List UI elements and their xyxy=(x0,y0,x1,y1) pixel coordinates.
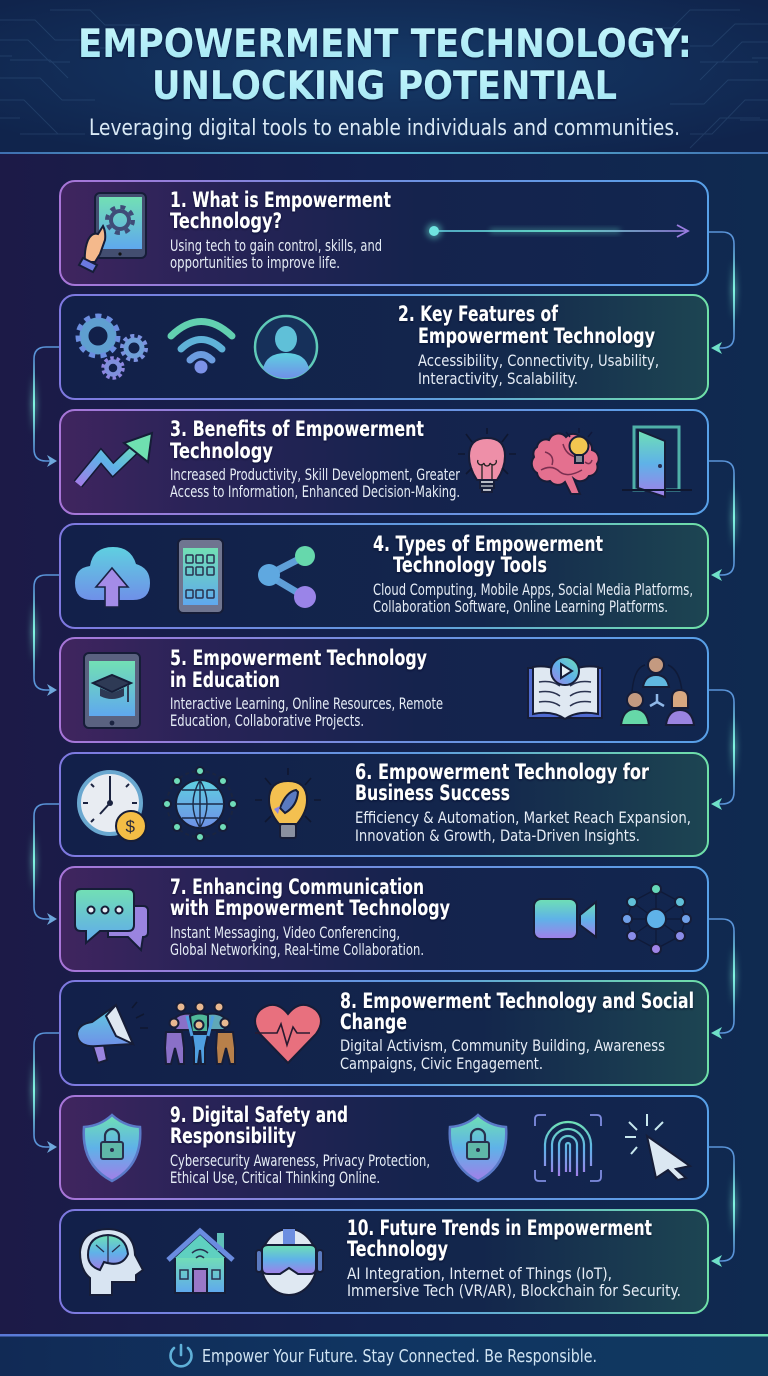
heading: 2. Key Features of xyxy=(398,302,559,326)
header title: UNLOCKING POTENTIAL xyxy=(152,64,617,109)
icon: group of people xyxy=(165,1002,235,1064)
icon: fingerprint xyxy=(535,1115,601,1181)
description xyxy=(170,694,443,730)
description: Ethical Use, Critical Thinking Online. xyxy=(170,1168,380,1187)
icon: share nodes xyxy=(258,546,316,608)
description: Innovation & Growth, Data-Driven Insights. xyxy=(355,826,640,845)
description: Using tech to gain control, skills, and xyxy=(170,236,382,255)
description: Immersive Tech (VR/AR), Blockchain for Security. xyxy=(347,1281,681,1300)
heading xyxy=(170,1103,348,1148)
icon: gears xyxy=(78,316,146,378)
icon: clock and dollar coin xyxy=(79,772,146,841)
description: Collaboration Software, Online Learning Platforms. xyxy=(373,597,668,616)
icon: smartphone xyxy=(178,539,223,613)
heading: Technology xyxy=(170,439,273,463)
icon: heart with pulse xyxy=(255,1005,321,1063)
header title: EMPOWERMENT TECHNOLOGY: xyxy=(78,22,692,67)
heading: in Education xyxy=(170,668,280,692)
description: Accessibility, Connectivity, Usability, xyxy=(418,351,659,370)
panel 3: benefits xyxy=(60,410,708,514)
heading xyxy=(340,989,694,1034)
icon: megaphone xyxy=(77,1002,148,1063)
heading: Responsibility xyxy=(170,1124,296,1148)
description xyxy=(170,236,382,272)
icon: three people collaborating xyxy=(621,657,694,725)
heading: 9. Digital Safety and xyxy=(170,1103,348,1127)
heading: 1. What is Empowerment xyxy=(170,188,391,212)
heading: 10. Future Trends in Empowerment xyxy=(347,1216,652,1240)
panel 4: tools xyxy=(60,524,708,628)
icon: open door xyxy=(622,427,692,497)
heading xyxy=(170,188,391,233)
panel 5: education xyxy=(60,638,708,742)
description: Campaigns, Civic Engagement. xyxy=(340,1054,543,1073)
icon: VR headset xyxy=(256,1229,323,1295)
heading: 7. Enhancing Communication xyxy=(170,875,424,899)
description: Interactivity, Scalability. xyxy=(418,369,578,388)
arrow: glowing line xyxy=(426,223,688,239)
subtitle: Leveraging digital tools to enable individuals and communities. xyxy=(89,116,680,141)
description: Digital Activism, Community Building, Awareness xyxy=(340,1036,665,1055)
description xyxy=(373,580,693,616)
icon: wifi xyxy=(171,322,232,374)
icon: light bulb with rocket xyxy=(255,768,321,838)
icon: chat bubbles xyxy=(75,889,148,950)
icon: book with play button xyxy=(528,657,602,719)
footer xyxy=(0,1334,768,1376)
heading: Technology? xyxy=(170,209,282,233)
heading xyxy=(355,760,649,805)
description xyxy=(170,923,424,959)
heading: 5. Empowerment Technology xyxy=(170,646,427,670)
description: Instant Messaging, Video Conferencing, xyxy=(170,923,400,942)
icon: shield with lock xyxy=(450,1115,506,1181)
heading xyxy=(398,302,655,348)
icon: clock and dollar coin: $ xyxy=(126,817,136,836)
heading: 3. Benefits of Empowerment xyxy=(170,417,424,441)
connectors between panels xyxy=(31,232,737,1267)
description xyxy=(340,1036,665,1073)
header title xyxy=(78,22,692,109)
description: Interactive Learning, Online Resources, Remote xyxy=(170,694,443,713)
heading: 6. Empowerment Technology for xyxy=(355,760,649,784)
icon: shield with lock xyxy=(84,1115,140,1181)
description: opportunities to improve life. xyxy=(170,253,340,272)
heading: with Empowerment Technology xyxy=(170,896,450,920)
description: AI Integration, Internet of Things (IoT), xyxy=(347,1264,612,1283)
heading xyxy=(170,646,427,692)
panel 9: digital safety xyxy=(60,1096,708,1199)
icon: power symbol xyxy=(170,1345,191,1366)
icon: tablet with graduation cap xyxy=(84,653,140,728)
description: Global Networking, Real-time Collaboration. xyxy=(170,940,424,959)
description xyxy=(347,1264,681,1300)
heading: Business Success xyxy=(355,781,510,805)
heading: Technology xyxy=(347,1237,448,1261)
panel 1: what is empowerment technology xyxy=(60,181,708,285)
icon: pink light bulb xyxy=(458,428,516,492)
heading: Technology Tools xyxy=(393,553,547,577)
description: Access to Information, Enhanced Decision-Making. xyxy=(170,482,460,501)
panel 10: future trends xyxy=(60,1210,708,1313)
description: Efficiency & Automation, Market Reach Expansion, xyxy=(355,808,691,827)
panel 2: key features xyxy=(60,295,708,399)
description: Increased Productivity, Skill Development, Greater xyxy=(170,465,460,484)
heading xyxy=(170,875,450,920)
icon: brain with bulb xyxy=(532,428,599,494)
heading xyxy=(170,417,424,463)
description xyxy=(170,465,460,501)
heading xyxy=(347,1216,652,1261)
heading: Empowerment Technology xyxy=(418,324,655,348)
heading xyxy=(373,532,603,577)
icon: video camera xyxy=(534,899,596,939)
panel 7: communication xyxy=(60,867,708,971)
heading: 4. Types of Empowerment xyxy=(373,532,603,556)
description xyxy=(418,351,659,388)
panel 6: business success xyxy=(60,753,708,856)
footer tagline: Empower Your Future. Stay Connected. Be Responsible. xyxy=(202,1346,597,1367)
panel 8: social change xyxy=(60,981,708,1085)
icon: user xyxy=(255,316,317,378)
icon: AI head xyxy=(80,1229,143,1295)
icon: cloud upload xyxy=(75,547,150,607)
icon: mouse cursor click xyxy=(625,1114,690,1180)
description: Education, Collaborative Projects. xyxy=(170,711,364,730)
icon: networked globe xyxy=(163,767,237,841)
icon: network xyxy=(622,884,691,954)
description xyxy=(355,808,691,845)
icon: rising chart arrow xyxy=(78,433,152,484)
description xyxy=(170,1151,430,1187)
description: Cybersecurity Awareness, Privacy Protection, xyxy=(170,1151,430,1170)
icon: smart house xyxy=(168,1231,233,1293)
icon: tablet with gear and hand xyxy=(79,193,146,272)
heading: Change xyxy=(340,1010,407,1034)
